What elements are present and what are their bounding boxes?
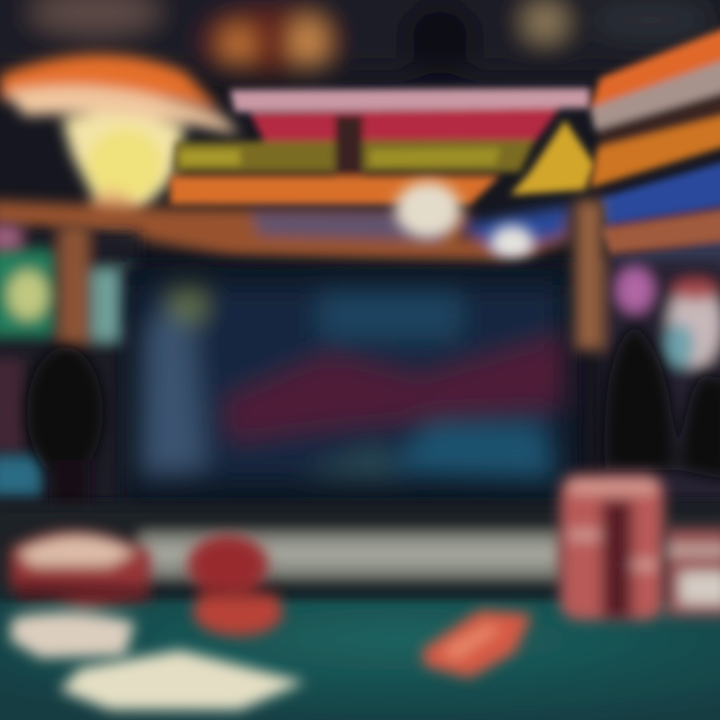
poker chips: far right stack xyxy=(666,528,720,616)
chart screen xyxy=(122,262,577,507)
banner: orange canopy left xyxy=(0,54,240,228)
right wall: pillar and screens xyxy=(575,200,720,500)
silhouette: right people xyxy=(604,325,720,480)
banner: right rainbow stripes xyxy=(590,26,720,280)
poker chips: tall right stack xyxy=(560,474,664,620)
playing cards xyxy=(60,650,305,710)
lights: globes xyxy=(395,182,534,261)
banner: central stripes xyxy=(170,88,595,205)
poker chips: centre stack xyxy=(188,535,283,636)
silhouette: left person xyxy=(27,347,103,510)
table rail xyxy=(0,505,720,605)
poker chips: left stack xyxy=(10,530,150,658)
poker chips: flat pile xyxy=(422,610,532,678)
table felt xyxy=(0,600,720,720)
banner: lower valance xyxy=(0,200,570,268)
left wall: screens and pillar xyxy=(0,225,140,502)
ceiling lights xyxy=(0,0,720,74)
